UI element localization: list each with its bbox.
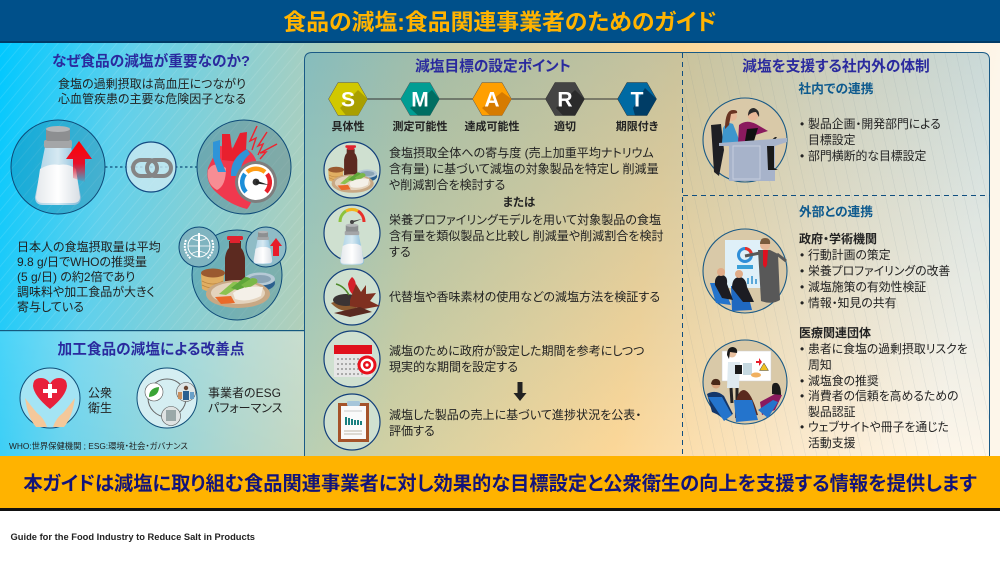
list: internal collaboration: 部門横断的な目標設定 [808, 149, 927, 163]
icon: calendar with target [324, 331, 380, 387]
list: medical organizations: 活動支援 [808, 436, 856, 450]
A: achievable [464, 82, 520, 133]
SMART hexagon chain [328, 82, 658, 133]
list: government and academia: 行動計画の策定 [808, 248, 891, 262]
icon: spices [324, 269, 380, 325]
icon: heart with blood pressure gauge [197, 120, 291, 214]
list: medical organizations: 患者に食塩の過剰摂取リスクを [808, 342, 968, 356]
heading: target setting points: 減塩目標の設定ポイント [415, 57, 571, 75]
T: time-bound [616, 82, 658, 133]
text: Japanese salt intake: 日本人の食塩摂取量は平均 [17, 239, 161, 254]
text: hypertension risk: 食塩の過剰摂取は高血圧につながり [58, 76, 246, 91]
text: realistic periods: 現実的な期間を設定する [389, 359, 518, 374]
list: internal collaboration: 目標設定 [808, 133, 856, 147]
conclusion band [0, 456, 1000, 511]
list: medical organizations: • [800, 374, 804, 388]
panel frame: targets and support [304, 52, 990, 456]
S: specific: S [341, 88, 355, 112]
label: public health: 衛生 [88, 401, 112, 415]
list: medical organizations: • [800, 420, 804, 434]
illustration: two women at a desk [703, 98, 787, 182]
M: measurable: 測定可能性 [392, 119, 448, 133]
icon: WHO emblem [179, 227, 219, 267]
A: achievable: 達成可能性 [464, 119, 520, 133]
icon: seasonings and processed foods [192, 230, 282, 320]
list: internal collaboration: • [800, 117, 804, 131]
heading: why salt reduction matters: なぜ食品の減塩が重要なのか? [52, 52, 250, 70]
list: medical organizations: • [800, 389, 804, 403]
icon: seasonings [324, 142, 380, 198]
list: medical organizations: 製品認証 [808, 405, 856, 419]
icon: public health [20, 368, 80, 428]
list: medical organizations: 減塩食の推奨 [808, 374, 879, 388]
text: nutrient profiling [389, 212, 664, 259]
list: government and academia: 政府・学術機関 [799, 231, 877, 246]
icon: clipboard report [324, 394, 380, 450]
list: internal collaboration [800, 117, 941, 163]
text: nutrient profiling: 含有量を類似製品と比較し 削減量や削減割合を検討 [389, 228, 664, 243]
footnote: WHO:世界保健機関 ; ESG:環境・社会・ガバナンス [9, 441, 188, 451]
text: Japanese salt intake: 9.8 g/日でWHOの推奨量 [17, 254, 147, 269]
T: time-bound: 期限付き [616, 119, 658, 133]
R: relevant: R [557, 88, 573, 112]
A: achievable: A [484, 88, 500, 112]
list: medical organizations [799, 325, 968, 450]
subheading: external: 外部との連携 [799, 204, 873, 219]
text: Japanese salt intake: 調味料や加工食品が大きく [17, 284, 155, 299]
label: ESG performance: パフォーマンス [208, 401, 282, 415]
panel: why salt reduction matters [0, 43, 304, 331]
heading: improvements: 加工食品の減塩による改善点 [57, 340, 245, 358]
text: or: または [503, 196, 536, 209]
text: realistic periods [389, 343, 644, 374]
label: ESG performance: 事業者のESG [208, 386, 281, 400]
list: medical organizations: 消費者の信頼を高めるための [808, 389, 959, 403]
S: specific [328, 82, 368, 133]
list: government and academia: 情報・知見の共有 [808, 296, 897, 310]
illustration: health professional presenting [703, 340, 787, 424]
list: government and academia: • [800, 264, 804, 278]
text: nutrient profiling: する [389, 245, 411, 259]
background [0, 42, 1000, 458]
list: government and academia: • [800, 296, 804, 310]
text: Japanese salt intake: 寄与している [17, 300, 84, 314]
text: Japanese salt intake [17, 239, 161, 314]
subheading: internal: 社内での連携 [798, 81, 874, 96]
text: verify methods: 代替塩や香味素材の使用などの減塩方法を検証する [389, 289, 660, 304]
text: nutrient profiling: 栄養プロファイリングモデルを用いて対象製品の食塩 [389, 212, 661, 227]
list: government and academia: 栄養プロファイリングの改善 [808, 264, 950, 278]
label: public health [88, 386, 112, 415]
connector: dotted line [105, 166, 197, 168]
text: identify products: や削減割合を検討する [389, 177, 505, 192]
text: realistic periods: 減塩のために政府が設定した期間を参考にしつつ [389, 343, 644, 358]
header: title band [0, 0, 1000, 43]
icon: small salt shaker [246, 227, 286, 267]
list: medical organizations: 医療関連団体 [799, 325, 871, 340]
conclusion band: 本ガイドは減塩に取り組む食品関連事業者に対し効果的な目標設定と公衆衛生の向上を支援する情報を提供します [23, 472, 977, 495]
M: measurable [392, 82, 448, 133]
list: government and academia: • [800, 280, 804, 294]
list: internal collaboration: • [800, 149, 804, 163]
label: public health: 公衆 [88, 386, 112, 400]
list: medical organizations: ウェブサイトや冊子を通じた [808, 420, 949, 434]
text: hypertension risk [58, 76, 246, 106]
R: relevant [546, 82, 584, 133]
icon: salt shaker with red arrow [11, 120, 105, 214]
text: identify products: 含有量) に基づいて減塩の対象製品を特定し 削減量 [389, 161, 659, 176]
panel: improvements from reducing salt in processed foods [0, 330, 304, 456]
text: publish progress: 減塩した製品の売上に基づいて進捗状況を公表・ [389, 407, 641, 422]
T: time-bound: T [631, 88, 644, 112]
text: Japanese salt intake: (5 g/日) の約2倍であり [17, 269, 135, 284]
arrow: down [514, 382, 526, 401]
M: measurable: M [411, 88, 429, 112]
icon: salt with gauge [324, 205, 380, 265]
label: ESG performance [208, 386, 282, 415]
list: medical organizations: • [800, 342, 804, 356]
heading: support systems: 減塩を支援する社内外の体制 [742, 57, 930, 75]
text: identify products: 食塩摂取全体への寄与度 (売上加重平均ナトリウム [389, 145, 654, 160]
text: publish progress: 評価する [389, 424, 435, 438]
illustration: presentation to government [703, 229, 787, 313]
text: identify products [389, 145, 659, 192]
S: specific: 具体性 [332, 119, 364, 133]
header: title band: 食品の減塩:食品関連事業者のためのガイド [283, 9, 717, 35]
footer: English title: Guide for the Food Industry to Reduce Salt in Products [10, 532, 255, 542]
text: hypertension risk: 心血管疾患の主要な危険因子となる [58, 91, 246, 106]
list: internal collaboration: 製品企画・開発部門による [808, 117, 941, 131]
text: publish progress [389, 407, 641, 438]
list: government and academia: • [800, 248, 804, 262]
list: government and academia [799, 231, 950, 310]
R: relevant: 適切 [554, 119, 576, 133]
icon: chain link [126, 142, 176, 192]
list: medical organizations: 周知 [808, 358, 832, 372]
icon: ESG cycle [137, 368, 197, 428]
list: government and academia: 減塩施策の有効性検証 [808, 280, 926, 294]
